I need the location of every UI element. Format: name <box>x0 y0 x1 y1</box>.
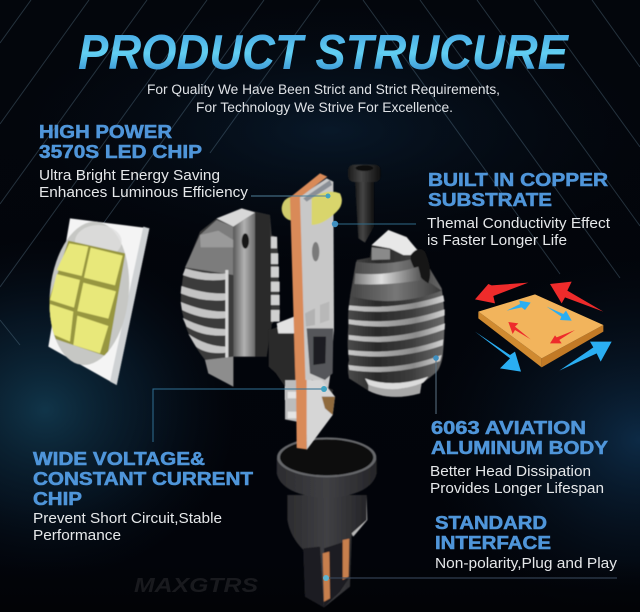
PCB copper substrate with LED <box>269 173 342 400</box>
text block: wide voltage chip: Prevent Short Circuit,Stable <box>33 510 222 527</box>
text block: aluminium body: Better Head Dissipation <box>430 463 591 480</box>
lower PCB section <box>285 380 335 450</box>
subtitle <box>147 82 500 115</box>
text block: standard interface <box>435 513 618 572</box>
connector line: LED chip <box>251 194 330 198</box>
connector line: aluminium body <box>433 355 439 414</box>
text block: aluminium body: 6063 AVIATION <box>431 418 586 438</box>
text block: aluminium body: ALUMINUM BODY <box>431 438 608 458</box>
subtitle: For Quality We Have Been Strict and Strict Requirements, <box>147 82 500 97</box>
connector line: standard interface <box>323 575 617 581</box>
text block: wide voltage chip: CHIP <box>33 489 82 509</box>
text block: standard interface: STANDARD <box>435 513 547 533</box>
text block: high power LED chip: HIGH POWER <box>39 122 172 142</box>
watermark: MAXGTRS <box>134 575 259 597</box>
right heatsink half <box>348 230 445 397</box>
connector line: copper substrate <box>332 221 416 227</box>
text block: high power LED chip: Enhances Luminous Efficiency <box>39 184 249 201</box>
text block: wide voltage chip <box>33 449 253 544</box>
text block: wide voltage chip: CONSTANT CURRENT <box>33 469 253 489</box>
text block: copper substrate: is Faster Longer Life <box>427 232 567 249</box>
icon: heat spreading plate with arrows <box>475 282 612 372</box>
icon: LED chip close-up <box>43 218 149 385</box>
text block: copper substrate: SUBSTRATE <box>428 190 552 210</box>
plastic socket base <box>277 437 377 607</box>
left heatsink half <box>181 208 280 387</box>
text block: wide voltage chip: WIDE VOLTAGE& <box>33 449 205 469</box>
subtitle: For Technology We Strive For Excellence. <box>196 100 453 115</box>
text block: aluminium body <box>430 418 608 497</box>
bolt screw <box>348 165 381 243</box>
title: PRODUCT STRUCURE <box>78 26 569 80</box>
text block: wide voltage chip: Performance <box>33 527 121 544</box>
text block: aluminium body: Provides Longer Lifespan <box>430 480 604 497</box>
text block: high power LED chip: 3570S LED CHIP <box>39 142 202 162</box>
text block: standard interface: Non-polarity,Plug and Play <box>435 555 618 572</box>
text block: copper substrate: BUILT IN COPPER <box>428 170 608 190</box>
text block: high power LED chip: Ultra Bright Energy Saving <box>39 167 220 184</box>
text block: copper substrate <box>427 170 611 249</box>
connector line: voltage chip <box>153 386 327 442</box>
text block: copper substrate: Themal Conductivity Effect <box>427 215 611 232</box>
text block: high power LED chip <box>39 122 249 201</box>
text block: standard interface: INTERFACE <box>435 533 551 553</box>
